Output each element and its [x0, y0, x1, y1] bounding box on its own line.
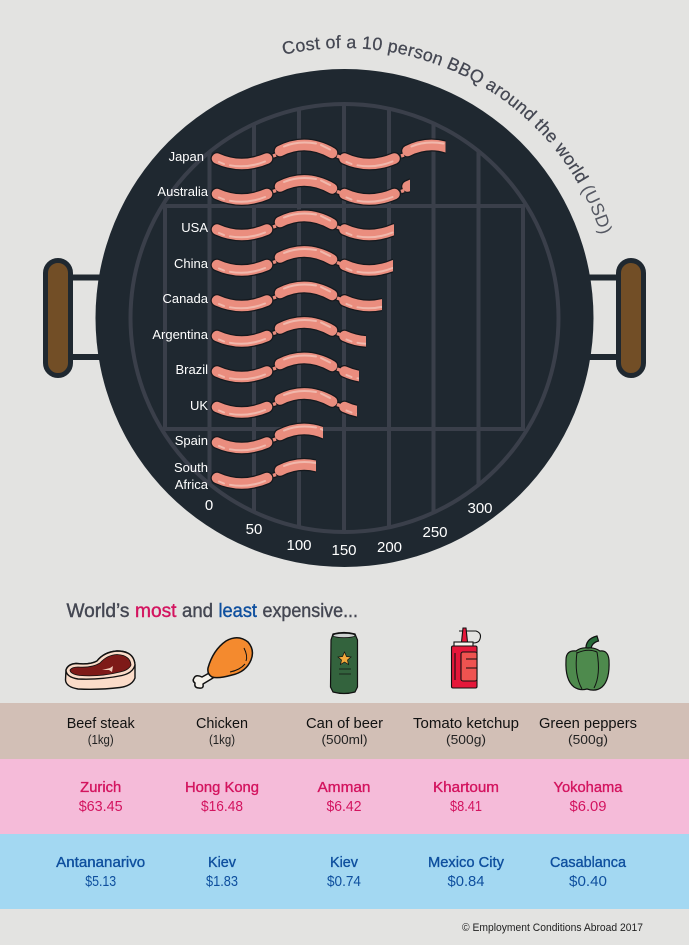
row: South Africa [174, 458, 316, 490]
axis labels: 150 [331, 542, 357, 559]
table band: most expensive: Yokohama [554, 780, 623, 796]
row: UK [191, 387, 357, 419]
table band: most expensive: $16.48 [201, 799, 243, 815]
row: South Africa: Africa [175, 477, 209, 492]
icon: left grill handle [46, 260, 110, 376]
table band: items: Green peppers [539, 716, 637, 732]
axis labels: 0 [205, 497, 213, 514]
section heading: most [135, 600, 177, 622]
axis labels: 100 [286, 537, 312, 554]
icon: green pepper [566, 636, 609, 690]
table band: items: (1kg) [209, 732, 235, 747]
table band: items: (500ml) [322, 732, 368, 747]
section heading: least [218, 600, 258, 622]
row: Spain: Spain [175, 433, 208, 448]
table band: least expensive: $0.74 [327, 874, 361, 890]
row: Canada [162, 284, 460, 308]
table band: least expensive: Mexico City [428, 855, 505, 871]
table band: least expensive: Kiev [330, 855, 359, 871]
icon: right grill handle [580, 260, 644, 376]
table band: least expensive: $1.83 [206, 874, 238, 890]
row: China [174, 249, 460, 273]
section heading: and [182, 600, 213, 622]
row: Australia: Australia [157, 184, 209, 199]
table band: items: (500g) [568, 732, 608, 747]
table band: most expensive: Hong Kong [185, 780, 259, 796]
row: Spain [175, 422, 323, 454]
table band: most expensive: Amman [318, 780, 370, 796]
table band: least expensive: Kiev [208, 855, 237, 871]
axis labels: 300 [467, 500, 493, 517]
icon: tomato ketchup [452, 628, 480, 688]
axis labels [205, 497, 493, 559]
row: China: China [174, 256, 209, 271]
table band: items: Can of beer [306, 716, 383, 732]
row: USA: USA [181, 220, 208, 235]
table band: items: Beef steak [67, 716, 135, 732]
row: Japan: Japan [169, 149, 204, 164]
row: Canada: Canada [162, 291, 209, 306]
table band: most expensive: $63.45 [79, 799, 123, 815]
row: Brazil: Brazil [175, 362, 208, 377]
axis labels: 50 [246, 521, 262, 538]
table band: items: Tomato ketchup [413, 716, 519, 732]
table band: most expensive: $6.09 [570, 799, 606, 815]
table band: items: Chicken [196, 716, 248, 732]
table band: least expensive: $5.13 [85, 874, 116, 890]
chart title: Cost of a 10 person BBQ around the world (USD) [282, 35, 612, 234]
row: South Africa: South [174, 460, 208, 475]
table band: least expensive: Antananarivo [56, 855, 145, 871]
table band: least expensive [0, 834, 689, 909]
section heading: expensive... [262, 600, 358, 622]
icon: beer can [330, 632, 358, 694]
row: Argentina [152, 320, 460, 344]
grill body [96, 69, 594, 567]
icon: chicken [193, 638, 252, 688]
row: USA [181, 214, 460, 237]
row: UK: UK [190, 398, 208, 413]
table band: least expensive: Casablanca [550, 855, 627, 871]
table band: most expensive [0, 759, 689, 834]
row: Japan [169, 142, 460, 166]
grill grate [130, 90, 558, 550]
table band: least expensive: $0.40 [569, 874, 607, 890]
section heading [66, 600, 358, 622]
table band: least expensive: $0.84 [448, 874, 484, 890]
table band: most expensive: Zurich [80, 780, 121, 796]
table band: items [0, 703, 689, 759]
table band: most expensive: Khartoum [433, 780, 499, 796]
row: Australia [157, 178, 460, 202]
axis labels: 250 [422, 524, 448, 541]
table band: most expensive: $6.42 [326, 799, 362, 815]
row: Brazil [176, 352, 359, 384]
table band: items: (500g) [446, 732, 486, 747]
row: Argentina: Argentina [152, 327, 209, 342]
icon: beef steak [66, 651, 135, 689]
sausage chart [152, 142, 460, 492]
section heading: World’s [66, 600, 130, 622]
axis labels: 200 [377, 539, 402, 556]
footer credit: © Employment Conditions Abroad 2017 [462, 922, 643, 934]
table band: items: (1kg) [88, 732, 114, 747]
table band: most expensive: $8.41 [450, 799, 482, 815]
